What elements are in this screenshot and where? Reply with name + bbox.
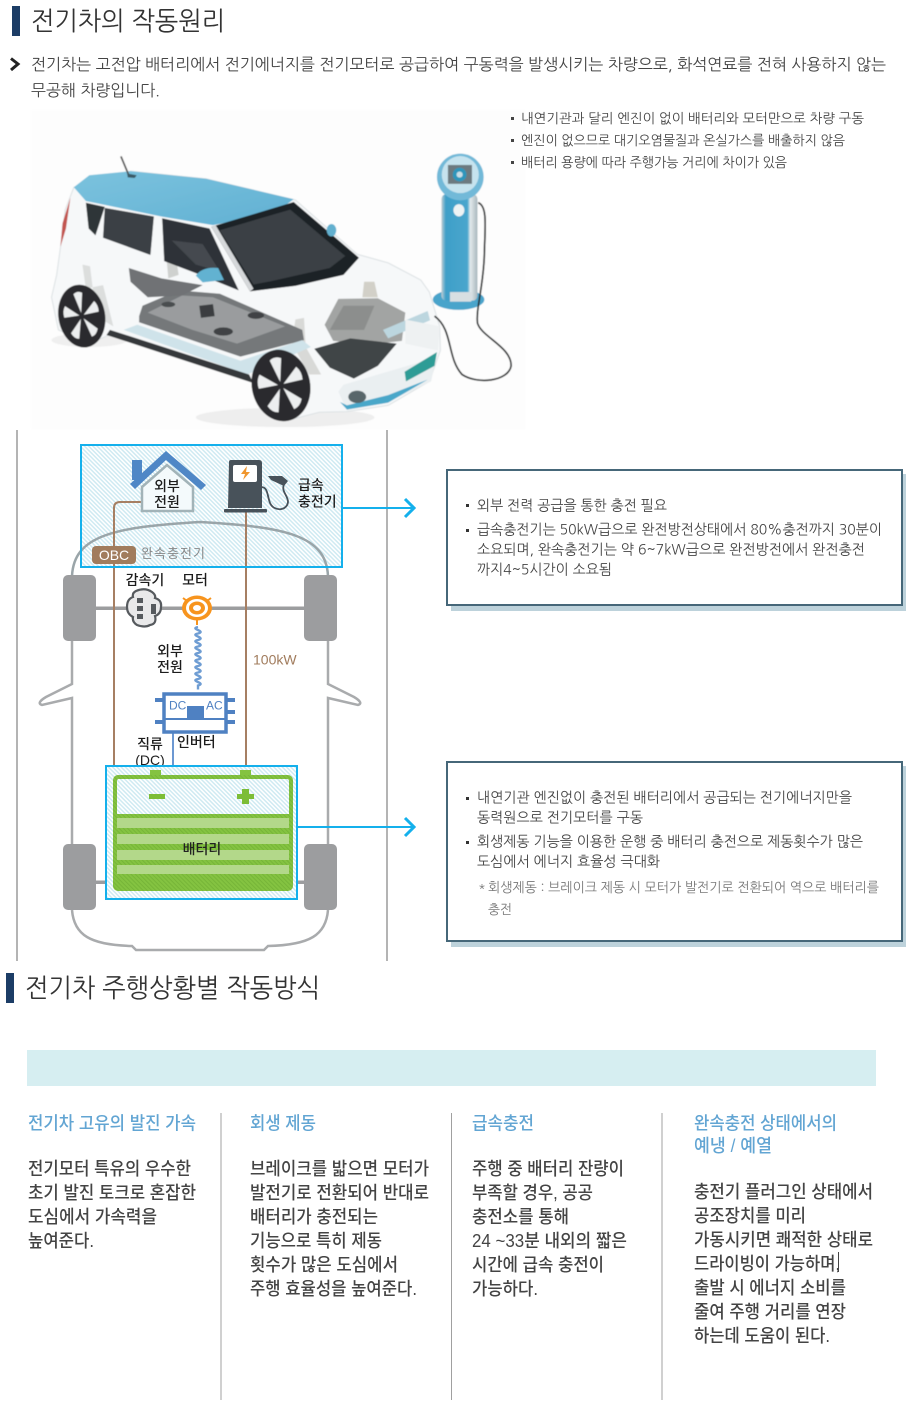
column: regenerative braking [250, 1114, 429, 1299]
column: launch acceleration: 도심에서 가속력을 [28, 1207, 157, 1227]
rear light [60, 198, 70, 247]
label: external power: 전원 [157, 659, 183, 675]
intro paragraph: 전기차는 고전압 배터리에서 전기에너지를 전기모터로 공급하여 구동력을 발생시키는 차량으로, 화석연료를 전혀 사용하지 않는 [31, 56, 886, 73]
column: pre-cooling and pre-heating: 줄여 주행 거리를 연장 [694, 1302, 846, 1322]
column: regenerative braking: 발전기로 전환되어 반대로 [250, 1183, 429, 1203]
diagram: wiring [114, 502, 246, 776]
label: direct current [135, 736, 165, 768]
charging post [433, 289, 484, 310]
icon: AC coil [195, 627, 201, 690]
column: fast charging: 24 ~33분 내외의 짧은 [472, 1231, 627, 1251]
bullet list: EV features: 내연기관과 달리 엔진이 없이 배터리와 모터만으로 차량 구동 [521, 111, 864, 125]
column: launch acceleration: 전기차 고유의 발진 가속 [28, 1114, 196, 1134]
heading: working principle: 전기차의 작동원리 [31, 8, 225, 34]
callout: charging: 급속충전기는 50kW급으로 완전방전상태에서 80%충전까지 30분이 [477, 522, 882, 538]
icon: inverter: DC [169, 698, 187, 712]
label: OBC slow charger [92, 546, 205, 564]
callout: battery [447, 762, 906, 947]
label: OBC slow charger: OBC [99, 547, 129, 563]
label: 100kW: 100kW [253, 652, 297, 668]
column: fast charging: 가능하다. [472, 1279, 538, 1299]
callout: battery: * [478, 881, 486, 894]
column dividers [220, 1113, 662, 1400]
rear suspension and arches [82, 265, 113, 326]
callout: battery: 충전 [488, 902, 512, 916]
icon: inverter: AC [206, 698, 223, 712]
callout: battery: 회생제동 : 브레이크 제동 시 모터가 발전기로 전환되어 역으로 배터리를 [488, 880, 879, 894]
label: external power [157, 643, 183, 675]
illustration: electric car and charger [31, 110, 526, 429]
callout: charging: 외부 전력 공급을 통한 충전 필요 [477, 498, 667, 514]
column: launch acceleration: 초기 발진 토크로 혼잡한 [28, 1183, 196, 1203]
bullet list: EV features: 엔진이 없으므로 대기오염물질과 온실가스를 배출하지 않음 [521, 133, 845, 147]
column: pre-cooling and pre-heating: 완속충전 상태에서의 [694, 1114, 837, 1134]
diagram: wheels and axles [63, 575, 337, 910]
icon: motor: 모터 [182, 572, 208, 588]
column: pre-cooling and pre-heating: 공조장치를 미리 [694, 1206, 806, 1226]
column: regenerative braking: 주행 효율성을 높여준다. [250, 1279, 417, 1299]
icon: fast charger [224, 460, 337, 512]
column: pre-cooling and pre-heating [694, 1114, 873, 1346]
icon: battery: 배터리 [183, 841, 221, 857]
column: pre-cooling and pre-heating: 가동시키면 쾌적한 상태로 [694, 1230, 873, 1250]
column: pre-cooling and pre-heating: 충전기 플러그인 상태에서 [694, 1182, 873, 1202]
icon: house with external power [130, 451, 206, 511]
column: fast charging [472, 1114, 627, 1299]
diagram: charging panel background [81, 445, 342, 567]
label: inverter: 인버터 [177, 734, 216, 750]
callout: battery: 도심에서 에너지 효율성 극대화 [477, 854, 660, 870]
diagram: car chassis outline [40, 522, 360, 950]
icon: reducer: 감속기 [126, 572, 164, 588]
column: fast charging: 충전소를 통해 [472, 1207, 569, 1227]
callout: battery: 동력원으로 전기모터를 구동 [477, 810, 643, 826]
side windows [86, 203, 105, 235]
arrow: battery info [297, 818, 414, 836]
label: external power: 외부 [157, 643, 183, 659]
side mirror [196, 268, 224, 282]
column: regenerative braking: 회생 제동 [250, 1114, 316, 1134]
callout: battery: 회생제동 기능을 이용한 운행 중 배터리 충전으로 제동횟수가 많은 [477, 834, 863, 850]
icon: battery [106, 766, 297, 899]
callout: charging: 소요되며, 완속충전기는 약 6~7kW급으로 완전방전에서 완전충전 [477, 542, 865, 558]
column: fast charging: 급속충전 [472, 1114, 534, 1134]
column: regenerative braking: 브레이크를 밟으면 모터가 [250, 1159, 429, 1179]
icon: house with external power: 전원 [154, 494, 180, 510]
column: regenerative braking: 횟수가 많은 도심에서 [250, 1255, 398, 1275]
intro paragraph [11, 56, 886, 99]
diagram: charging panel border [81, 445, 342, 567]
icon: fast charger: 급속 [298, 477, 324, 493]
icon: house with external power: 외부 [154, 478, 180, 494]
front wheel [245, 344, 317, 427]
motor and engine bay [325, 298, 405, 344]
column: launch acceleration [28, 1114, 196, 1251]
label: OBC slow charger: 완속충전기 [141, 546, 205, 561]
intro paragraph: 무공해 차량입니다. [31, 82, 160, 99]
callout: battery: 내연기관 엔진없이 충전된 배터리에서 공급되는 전기에너지만을 [477, 790, 852, 806]
column: pre-cooling and pre-heating: 하는데 도움이 된다. [694, 1326, 830, 1346]
roof [74, 171, 294, 225]
car body [52, 171, 440, 419]
callout: charging [447, 470, 906, 611]
heading: operation by driving condition: 전기차 주행상황별 작동방식 [25, 975, 320, 1001]
arrow: charging info [342, 499, 414, 517]
column: fast charging: 주행 중 배터리 잔량이 [472, 1159, 624, 1179]
bullet list: EV features [511, 111, 864, 169]
charging cable [435, 203, 511, 380]
icon: inverter [155, 694, 235, 732]
icon: reducer [126, 572, 164, 626]
banner band [27, 1050, 876, 1086]
battery pack [139, 290, 304, 357]
column: regenerative braking: 배터리가 충전되는 [250, 1207, 378, 1227]
column: pre-cooling and pre-heating: 드라이빙이 가능하며, [694, 1254, 840, 1274]
icon: motor [182, 572, 212, 625]
label: direct current: (DC) [135, 752, 165, 768]
column: launch acceleration: 전기모터 특유의 우수한 [28, 1159, 191, 1179]
icon: fast charger: 충전기 [298, 494, 337, 510]
windshield [211, 202, 359, 291]
column: pre-cooling and pre-heating: 예냉 / 예열 [694, 1136, 772, 1156]
number plate and fog light [405, 352, 437, 381]
column: pre-cooling and pre-heating: 출발 시 에너지 소비를 [694, 1278, 846, 1298]
column: regenerative braking: 기능으로 특히 제동 [250, 1231, 382, 1251]
bullet list: EV features: 배터리 용량에 따라 주행가능 거리에 차이가 있음 [521, 155, 787, 169]
rear wheel [53, 281, 110, 351]
column: fast charging: 부족할 경우, 공공 [472, 1183, 593, 1203]
column: launch acceleration: 높여준다. [28, 1231, 94, 1251]
column: fast charging: 시간에 급속 충전이 [472, 1255, 604, 1275]
panel divider lines [16, 430, 388, 961]
callout: charging: 까지4~5시간이 소요됨 [477, 562, 612, 578]
label: direct current: 직류 [137, 736, 163, 752]
